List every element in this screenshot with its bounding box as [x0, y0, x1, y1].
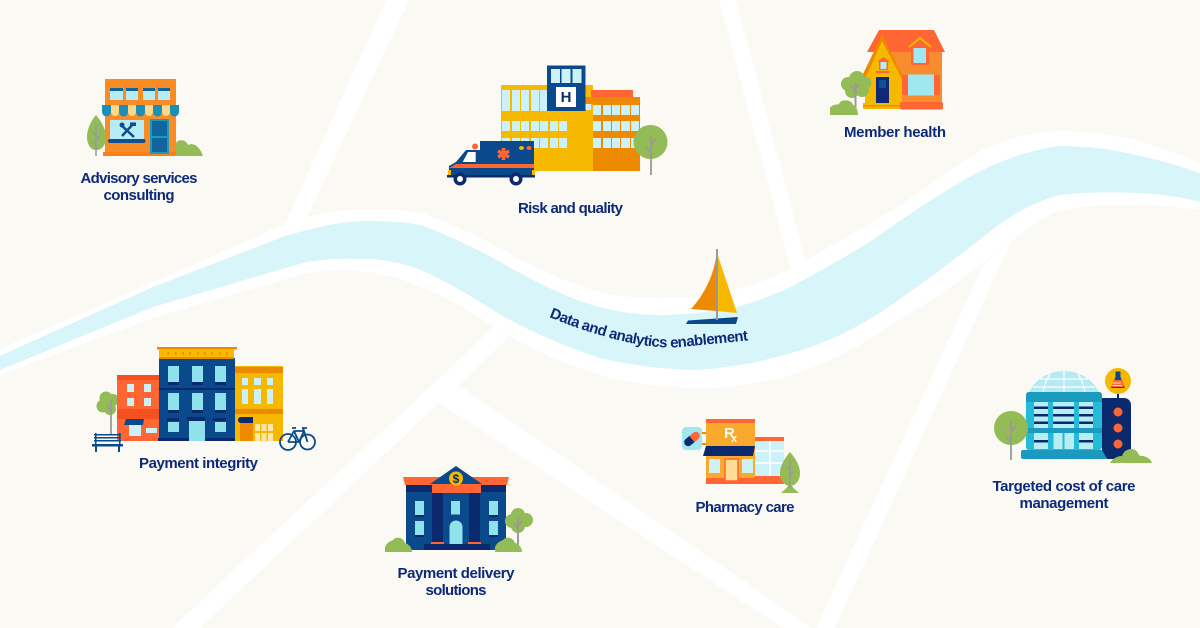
label: targeted cost of care management: Targeted cost of care [992, 478, 1136, 495]
boat: sailboat [686, 249, 738, 324]
label: member health: Member health [844, 124, 946, 141]
icon: tree [87, 115, 106, 156]
panel: advisory services consulting [80, 79, 203, 204]
icon: tower with lab badge [1102, 368, 1131, 459]
panel: pharmacy care [682, 419, 800, 516]
icon: hospital [501, 66, 640, 171]
icon: bench [92, 433, 123, 452]
panel: member health [830, 30, 946, 141]
icon: tree [780, 452, 800, 493]
label: targeted cost of care management: management [1020, 495, 1108, 512]
icon: house [862, 30, 945, 110]
label: pharmacy care: Pharmacy care [696, 499, 794, 516]
icon: pharmacy: x [731, 433, 738, 445]
panel: targeted cost of care management [992, 368, 1152, 512]
panel: payment integrity [92, 347, 315, 472]
label: data and analytics enablement: Data and analytics enablement [550, 308, 748, 348]
icon: bushes and tree [385, 508, 533, 552]
road network [172, 0, 1011, 628]
river [0, 131, 1200, 388]
panel: risk and quality [447, 66, 668, 217]
icon: shop building [102, 79, 179, 156]
label: payment delivery solutions: Payment delivery [398, 565, 515, 582]
icon: tree [96, 392, 119, 435]
label: advisory services consulting: Advisory services [80, 170, 198, 187]
icon: blue building [157, 347, 237, 441]
icon: yellow building [235, 366, 283, 441]
icon: bush [176, 140, 203, 156]
icon: ambulance [447, 141, 535, 186]
icon: pill sign [682, 427, 706, 450]
icon: bush [1110, 449, 1152, 463]
label: payment delivery solutions: solutions [426, 582, 486, 599]
icon: tree [994, 411, 1028, 460]
icon: pharmacy [703, 419, 784, 484]
label: advisory services consulting: consulting [104, 187, 174, 204]
icon: hospital: H [561, 89, 571, 106]
label: payment delivery solutions [398, 565, 515, 599]
label: targeted cost of care management [992, 478, 1136, 512]
icon: tree and bush [830, 71, 872, 115]
icon: bicycle [280, 428, 315, 450]
icon: tree [634, 125, 668, 175]
icon: bank: $ [453, 472, 460, 486]
icon: red building [117, 375, 159, 441]
icon: domed building [1021, 371, 1107, 459]
icon: pharmacy: R [724, 425, 735, 442]
icon: bank [403, 466, 509, 550]
panel: payment delivery solutions [385, 466, 533, 599]
label: risk and quality: Risk and quality [518, 200, 624, 217]
label: payment integrity: Payment integrity [139, 455, 259, 472]
label: advisory services consulting [80, 170, 198, 204]
